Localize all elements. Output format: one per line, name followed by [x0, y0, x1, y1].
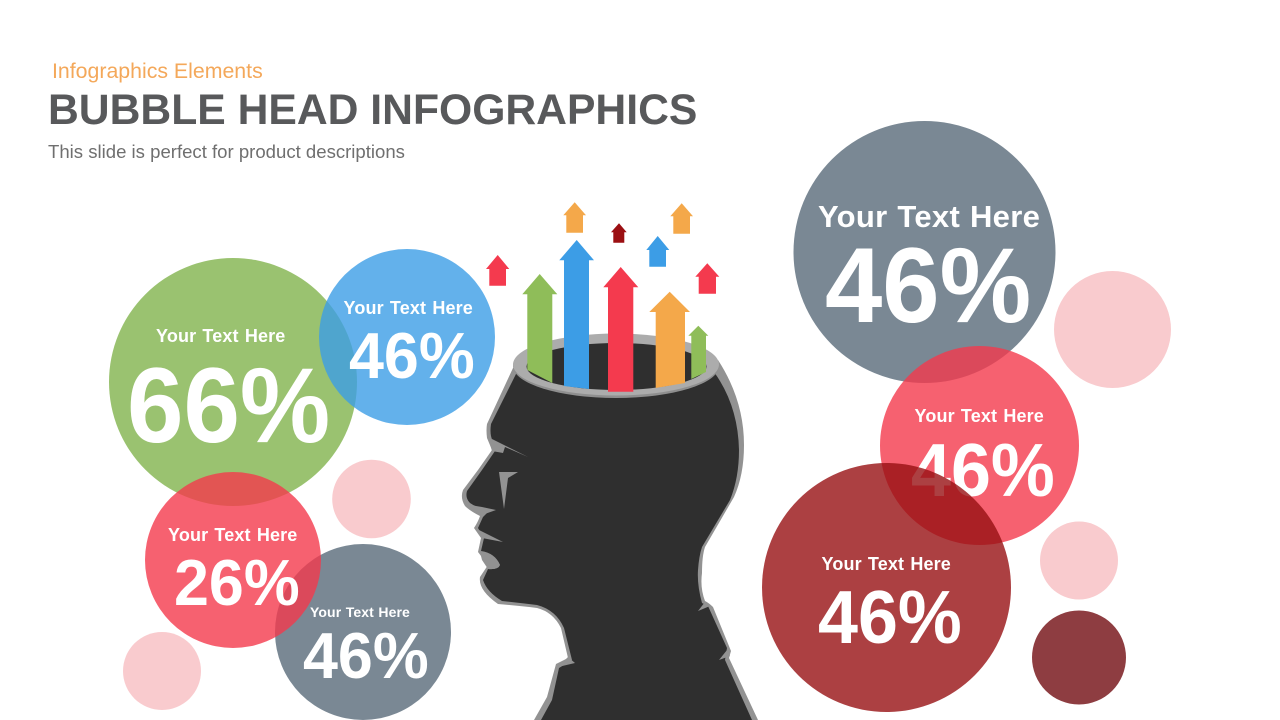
bubble: red 26%: Your Text Here — [168, 525, 297, 545]
bubble: green 66%: 66% — [127, 347, 330, 466]
eye mark — [499, 472, 518, 509]
arrow: red large — [603, 267, 638, 392]
arrow: red floating left — [486, 255, 509, 286]
bubble: dark red 46%: 46% — [818, 576, 962, 659]
decorative pink bubbles — [123, 271, 1171, 710]
bubble: green 66% — [109, 258, 357, 506]
bubble: slate 46% large — [794, 121, 1056, 383]
collar marks — [558, 657, 575, 667]
arrow: orange floating right — [670, 203, 693, 234]
bubble: slate 46% small circle — [275, 544, 451, 720]
arrow: orange large — [649, 292, 690, 388]
subtitle: This slide is perfect for product descriptions — [48, 141, 405, 162]
bubble: red 46% right: 46% — [911, 429, 1055, 512]
bubble: dark red 46% — [762, 463, 1011, 712]
bubble: blue 46% — [319, 249, 495, 425]
title: BUBBLE HEAD INFOGRAPHICS — [48, 86, 697, 134]
bubble: red 26% — [145, 472, 321, 648]
arrow: green large — [522, 274, 557, 383]
arrow: blue floating — [646, 236, 669, 267]
maroon bubble — [1032, 610, 1126, 704]
slate bubble text: 46% — [303, 619, 429, 692]
bubble: blue 46%: Your Text Here — [344, 298, 473, 318]
arrow: red floating right — [695, 263, 719, 294]
bubble: green 66%: Your Text Here — [156, 326, 285, 346]
brow mark — [488, 437, 528, 457]
bubble: red 46% right: Your Text Here — [914, 406, 1044, 426]
nose mark — [470, 505, 496, 515]
arrow: blue large — [559, 240, 594, 389]
arrow: dark red floating — [611, 223, 627, 243]
bubble: dark red 46%: Your Text Here — [822, 554, 951, 574]
lip mark — [480, 552, 500, 569]
bubble: red 46% right — [880, 346, 1079, 545]
eyebrow heading: Infographics Elements — [52, 59, 263, 83]
arrow: green small — [688, 326, 708, 379]
arrow: orange floating top — [563, 202, 586, 233]
head silhouette — [462, 360, 758, 720]
bubble: blue 46%: 46% — [349, 319, 475, 392]
bubble: red 26%: 26% — [174, 546, 300, 619]
open skull rim — [513, 334, 719, 398]
slate bubble text: Your Text Here — [310, 604, 410, 620]
bubble: slate 46% large: 46% — [825, 226, 1031, 345]
mouth mark — [477, 529, 503, 542]
bubble: slate 46% large: Your Text Here — [818, 199, 1040, 234]
